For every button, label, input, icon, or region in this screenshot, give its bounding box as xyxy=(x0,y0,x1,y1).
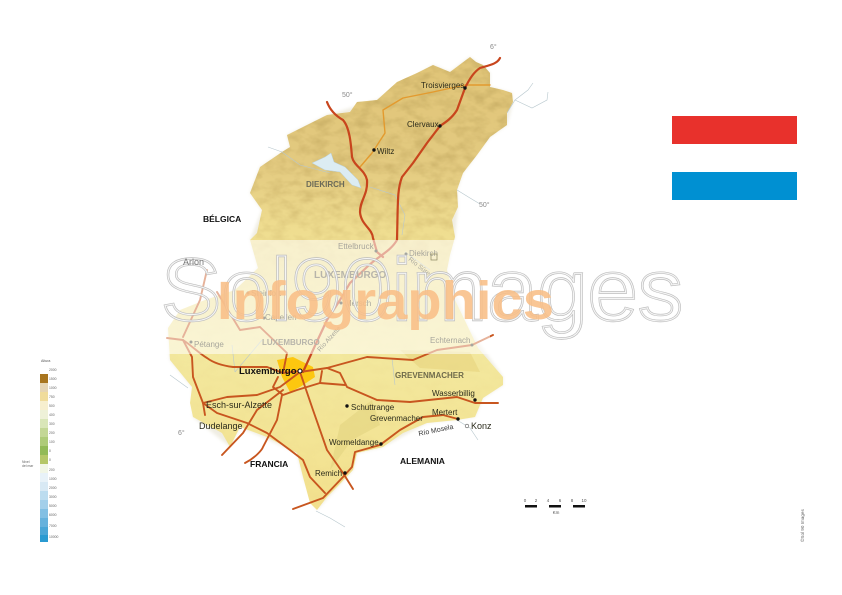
elevation legend xyxy=(22,359,59,542)
town labels xyxy=(199,81,492,478)
capital label: Luxemburgo xyxy=(239,366,297,377)
scale segment 2 xyxy=(549,505,561,508)
watermark: orange wordmark: Infographics xyxy=(217,271,554,331)
town: Capellen: Capellen xyxy=(265,313,297,322)
copyright: ©Sol 90 Images xyxy=(799,509,805,542)
flag: blue stripe xyxy=(672,172,797,200)
town: Diekirch: Diekirch xyxy=(409,249,438,258)
legend values: 6000 xyxy=(49,513,57,517)
legend values: 500 xyxy=(49,404,55,408)
flag: red stripe xyxy=(672,116,797,144)
Luxembourg city area xyxy=(277,357,315,392)
river: Sûre: Río Sûre xyxy=(407,256,432,278)
scale numbers: 8 xyxy=(571,498,574,503)
legend values: 1000 xyxy=(49,386,57,390)
scale numbers: 6 xyxy=(559,498,562,503)
rivers and borders beyond the frontier xyxy=(170,83,548,527)
graticule: 6 north: 6° xyxy=(490,43,497,51)
Konz marker xyxy=(465,424,469,428)
label: Esch-sur-Alzette: Esch-sur-Alzette xyxy=(206,400,272,410)
legend values: 2000 xyxy=(49,486,57,490)
graticule labels xyxy=(178,43,497,437)
scale numbers: 10 xyxy=(581,498,587,503)
sea level note: Nivel xyxy=(22,460,30,464)
label: Schuttrange: Schuttrange xyxy=(351,403,395,412)
label: Clervaux: Clervaux xyxy=(407,120,439,129)
district label: Grevenmacher: GREVENMACHER xyxy=(395,371,464,380)
scale unit: Km xyxy=(553,510,560,515)
town: Echternach: Echternach xyxy=(430,336,470,345)
label: Dudelange: Dudelange xyxy=(199,421,243,431)
flag of Luxembourg xyxy=(672,116,797,200)
river: Alzette: Río Alzette xyxy=(316,325,343,353)
roads south and east xyxy=(167,270,498,509)
graticule: 50 north west: 50° xyxy=(342,91,353,99)
legend colour scale xyxy=(40,374,48,542)
legend values: 5000 xyxy=(49,504,57,508)
legend values: 200 xyxy=(49,468,55,472)
legend values: 1500 xyxy=(49,377,57,381)
lake xyxy=(312,153,361,188)
highway north east xyxy=(303,58,500,372)
secondary road xyxy=(360,85,490,167)
graticule: 50 east: 50° xyxy=(479,201,490,209)
town: Pétange: Pétange xyxy=(194,340,224,349)
label: Mertert: Mertert xyxy=(432,408,458,417)
country label: Francia: FRANCIA xyxy=(250,459,288,469)
town: Steinfort: Steinfort xyxy=(251,289,282,298)
main roads xyxy=(167,58,500,509)
legend values: 100 xyxy=(49,440,55,444)
town: Ettelbruck: Ettelbruck xyxy=(338,242,375,251)
legend values: 300 xyxy=(49,422,55,426)
terrain xyxy=(168,57,513,510)
legend values: 0 xyxy=(49,458,51,462)
legend values: 750 xyxy=(49,395,55,399)
district label: Diekirch: DIEKIRCH xyxy=(306,180,345,189)
legend values: 1000 xyxy=(49,477,57,481)
map halo xyxy=(168,57,513,510)
scale numbers: 2 xyxy=(535,498,538,503)
legend values: 200 xyxy=(49,431,55,435)
country label: Bélgica: BÉLGICA xyxy=(203,214,241,224)
label: Arlon: Arlon xyxy=(183,257,204,267)
label: Wormeldange: Wormeldange xyxy=(329,438,379,447)
map of Luxembourg xyxy=(150,43,548,527)
country label: Alemania: ALEMANIA xyxy=(400,456,445,466)
watermark: outlined wordmark: Sol90images xyxy=(161,240,683,339)
scale segments xyxy=(525,505,537,508)
graticule: 6 south: 6° xyxy=(178,429,185,437)
infographic canvas xyxy=(22,44,805,542)
scale numbers xyxy=(524,498,587,503)
district: Luxemburgo: LUXEMBURGO xyxy=(262,338,320,347)
scale segment 3 xyxy=(573,505,585,508)
city marker: Luxemburgo xyxy=(298,369,302,373)
highway north west xyxy=(327,102,383,257)
town markers under band xyxy=(190,250,474,346)
scale bar xyxy=(524,498,587,515)
label: Wasserbillig: Wasserbillig xyxy=(432,389,475,398)
watermark: outlined wordmark: Sol90images xyxy=(161,240,683,339)
legend values: 7000 xyxy=(49,524,57,528)
river label: Mosela: Río Mosela xyxy=(418,424,454,438)
legend values: 400 xyxy=(49,413,55,417)
label: Troisvierges: Troisvierges xyxy=(421,81,464,90)
label: Grevenmacher: Grevenmacher xyxy=(370,414,423,423)
label: Konz: Konz xyxy=(471,421,492,431)
region: Luxemburgo district: LUXEMBURGO xyxy=(314,270,386,281)
white translucent band xyxy=(160,240,490,354)
town markers xyxy=(343,86,477,475)
scale numbers: 0 xyxy=(524,498,527,503)
legend values: 3000 xyxy=(49,495,57,499)
legend values: 2000 xyxy=(49,368,57,372)
scale numbers: 4 xyxy=(547,498,550,503)
place names under the band xyxy=(194,242,470,353)
legend values xyxy=(49,368,59,539)
sea level note: del mar xyxy=(22,464,34,468)
legend values: 0 xyxy=(49,449,51,453)
town: Mersch: Mersch xyxy=(345,299,371,308)
label: Wiltz: Wiltz xyxy=(377,147,394,156)
label: Remich: Remich xyxy=(315,469,342,478)
legend title: Altura xyxy=(41,359,50,363)
small square marker xyxy=(431,254,437,260)
legend values: 10000 xyxy=(49,535,59,539)
